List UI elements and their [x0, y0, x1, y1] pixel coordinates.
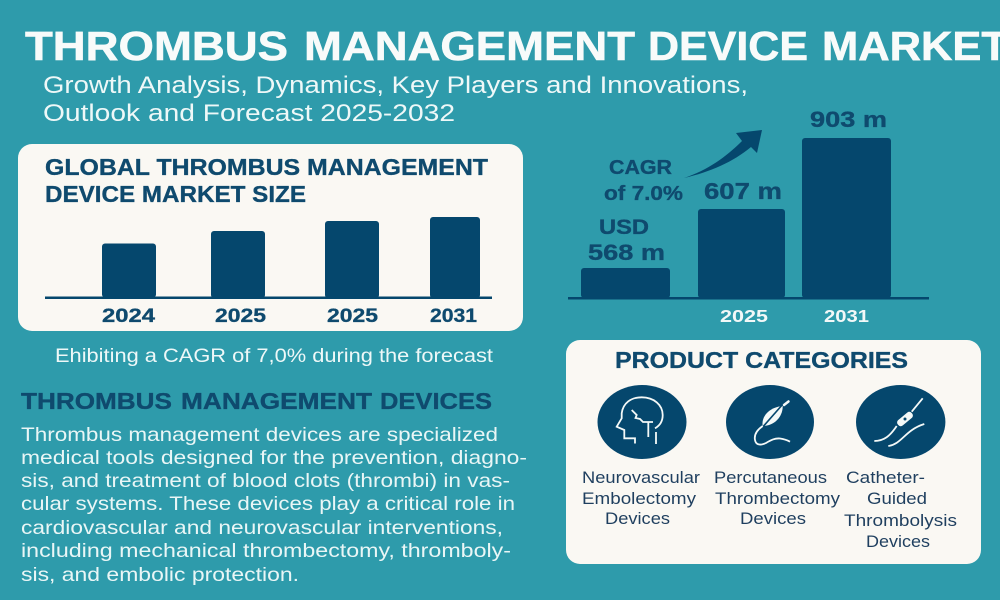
panel heading: GLOBAL THROMBUS MANAGEMENT: [45, 154, 488, 180]
bar chart: market size: 2031: [430, 305, 477, 327]
label: catheter-guided: Devices: [866, 532, 930, 551]
CAGR note: Ehibiting a CAGR of 7,0% during the forecast: [55, 346, 494, 367]
bar chart: market size: [45, 217, 492, 327]
bar chart: market size: 2025: [215, 305, 266, 327]
icon: balloon catheter: [726, 385, 814, 459]
icon: catheter: [856, 385, 945, 459]
label: neurovascular: Devices: [605, 509, 670, 528]
year labels: 2031: [824, 306, 869, 326]
section heading: DEVICES: [380, 388, 492, 414]
arrow: growth: [684, 130, 762, 178]
description text: including mechanical thrombectomy, thromboly-: [21, 540, 511, 562]
bar chart: market size: 2025: [327, 305, 378, 327]
title: MARKET: [822, 23, 1000, 69]
bar chart: forecast: [568, 107, 929, 326]
panel: product categories: [566, 340, 981, 564]
label: percutaneous: Thrombectomy: [715, 489, 841, 508]
label: neurovascular: [582, 468, 700, 528]
label: catheter-guided: [844, 468, 957, 551]
description text: [21, 424, 527, 586]
title: MANAGEMENT: [304, 23, 635, 69]
description text: medical tools designed for the prevention, diagno-: [21, 447, 527, 469]
description text: cular systems. These devices play a critical role in: [21, 493, 515, 515]
year labels: [720, 306, 869, 326]
icon: head with clot: [598, 385, 686, 459]
subtitle: Growth Analysis, Dynamics, Key Players and Innovations,: [43, 72, 748, 99]
title: [25, 23, 1000, 69]
description text: sis, and embolic protection.: [21, 564, 299, 586]
panel: thrombus management devices: [21, 388, 527, 586]
label: catheter-guided: Guided: [867, 489, 927, 508]
section heading: MANAGEMENT: [181, 388, 372, 414]
description text: sis, and treatment of blood clots (thrombi) in vas-: [21, 470, 510, 492]
panel heading: [45, 154, 488, 207]
bar chart: market size: 2024: [102, 305, 155, 327]
label: neurovascular: Embolectomy: [582, 489, 697, 508]
label: percutaneous: Devices: [740, 509, 806, 528]
CAGR label: of 7.0%: [604, 182, 683, 205]
value labels: USD: [599, 215, 649, 239]
title: DEVICE: [648, 23, 808, 69]
panel: global market size: [18, 144, 523, 331]
label: catheter-guided: Catheter-: [846, 468, 925, 487]
description text: cardiovascular and neurovascular interventions,: [21, 517, 503, 539]
CAGR label: [604, 156, 683, 205]
value labels: 903 m: [810, 107, 887, 132]
subtitle: Outlook and Forecast 2025-2032: [43, 100, 455, 127]
label: percutaneous: Percutaneous: [714, 468, 827, 487]
subtitle: [43, 72, 748, 127]
label: percutaneous: [714, 468, 841, 528]
section heading: [21, 388, 492, 414]
panel heading: PRODUCT CATEGORIES: [615, 347, 908, 373]
value labels: 607 m: [704, 178, 782, 204]
section heading: THROMBUS: [21, 388, 172, 414]
value labels: 568 m: [588, 240, 665, 265]
label: catheter-guided: Thrombolysis: [844, 511, 957, 530]
title: THROMBUS: [25, 23, 288, 69]
CAGR label: CAGR: [609, 156, 672, 179]
year labels: 2025: [720, 306, 768, 326]
value labels: [588, 107, 887, 265]
label: neurovascular: Neurovascular: [582, 468, 700, 487]
description text: Thrombus management devices are specialized: [21, 424, 498, 446]
panel heading: DEVICE MARKET SIZE: [45, 181, 306, 207]
